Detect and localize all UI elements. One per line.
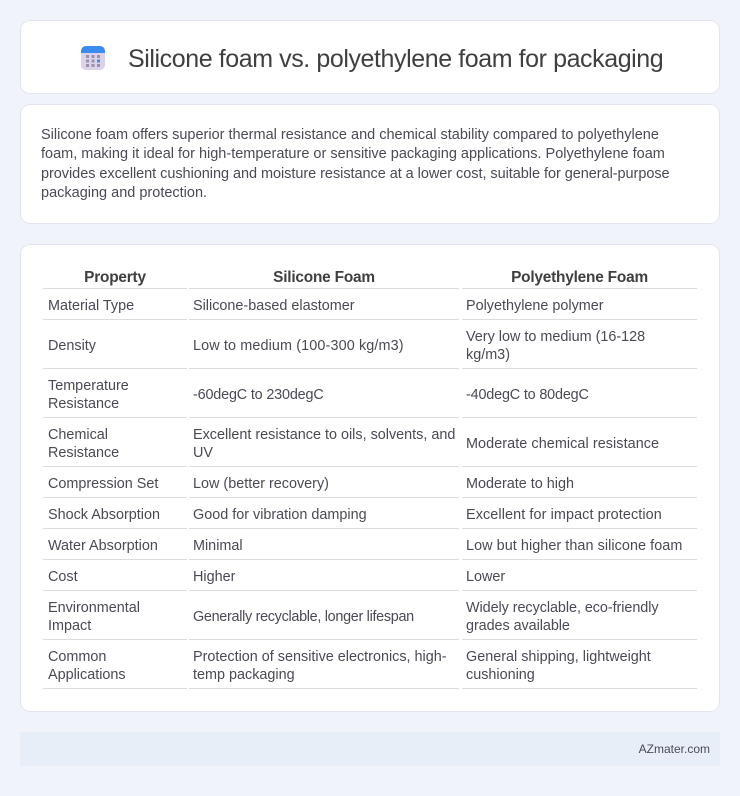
row: water absorption: Minimal — [193, 538, 243, 554]
row: common applications: cushioning — [466, 667, 535, 683]
row: compression set: Low (better recovery) — [193, 476, 329, 492]
row: shock absorption: Shock Absorption — [48, 507, 160, 523]
footer bar — [20, 732, 720, 766]
row: chemical resistance — [48, 427, 659, 461]
row: temperature resistance: Resistance — [48, 396, 119, 412]
row: material type: Material Type — [48, 298, 134, 314]
row: chemical resistance: UV — [193, 445, 213, 461]
panel: summary — [20, 104, 720, 224]
row: common applications: Applications — [48, 667, 126, 683]
table header: Polyethylene Foam — [511, 269, 648, 286]
panel: title card — [20, 20, 720, 94]
row: chemical resistance: Moderate chemical resistance — [466, 436, 659, 452]
summary text: foam, making it ideal for high-temperature or sensitive packaging applications. Polyethylene foam — [41, 146, 665, 162]
row: compression set — [48, 476, 574, 492]
row: common applications: temp packaging — [193, 667, 295, 683]
row: shock absorption: Excellent for impact protection — [466, 507, 662, 523]
row: material type: Silicone-based elastomer — [193, 298, 355, 314]
row: density: Low to medium (100-300 kg/m3) — [193, 338, 404, 354]
row: environmental impact — [48, 600, 658, 634]
row: chemical resistance: Chemical — [48, 427, 108, 443]
row: common applications: Protection of sensitive electronics, high- — [193, 649, 447, 665]
row: shock absorption — [48, 507, 662, 523]
icon: calendar — [81, 46, 105, 70]
summary text: provides excellent cushioning and moisture resistance at a lower cost, suitable for general-purpose — [41, 166, 670, 182]
row: density: Density — [48, 338, 96, 354]
row: water absorption: Low but higher than silicone foam — [466, 538, 682, 554]
row: temperature resistance: -60degC to 230degC — [193, 387, 324, 403]
row: water absorption — [48, 538, 682, 554]
row: cost — [48, 569, 505, 585]
table header: Silicone Foam — [273, 269, 375, 286]
row: temperature resistance: -40degC to 80degC — [466, 387, 589, 403]
row: environmental impact: Generally recyclable, longer lifespan — [193, 609, 414, 625]
row: compression set: Moderate to high — [466, 476, 574, 492]
row: chemical resistance: Excellent resistance to oils, solvents, and — [193, 427, 455, 443]
summary text: Silicone foam offers superior thermal resistance and chemical stability compared to polyethylene — [41, 127, 659, 143]
row: environmental impact: Impact — [48, 618, 91, 634]
row: environmental impact: Widely recyclable, eco-friendly — [466, 600, 658, 616]
row: common applications — [48, 649, 651, 683]
footer text: AZmater.com — [639, 742, 710, 756]
row: common applications: Common — [48, 649, 106, 665]
row: temperature resistance: Temperature — [48, 378, 129, 394]
title: Silicone foam vs. polyethylene foam for packaging — [128, 45, 663, 73]
row: shock absorption: Good for vibration damping — [193, 507, 367, 523]
row: environmental impact: Environmental — [48, 600, 140, 616]
table header: Property — [84, 269, 146, 286]
row: chemical resistance: Resistance — [48, 445, 119, 461]
row: water absorption: Water Absorption — [48, 538, 158, 554]
row: density: Very low to medium (16-128 — [466, 329, 645, 345]
table header — [84, 269, 648, 286]
row: material type: Polyethylene polymer — [466, 298, 604, 314]
row: temperature resistance — [48, 378, 589, 412]
row: common applications: General shipping, lightweight — [466, 649, 651, 665]
row: density — [48, 329, 645, 363]
summary text: packaging and protection. — [41, 185, 207, 201]
row: density: kg/m3) — [466, 347, 510, 363]
row: material type — [48, 298, 604, 314]
row: compression set: Compression Set — [48, 476, 158, 492]
row: cost: Lower — [466, 569, 505, 585]
panel: comparison table — [20, 244, 720, 712]
summary text — [41, 127, 670, 201]
row: cost: Higher — [193, 569, 235, 585]
row: environmental impact: grades available — [466, 618, 570, 634]
row: cost: Cost — [48, 569, 78, 585]
